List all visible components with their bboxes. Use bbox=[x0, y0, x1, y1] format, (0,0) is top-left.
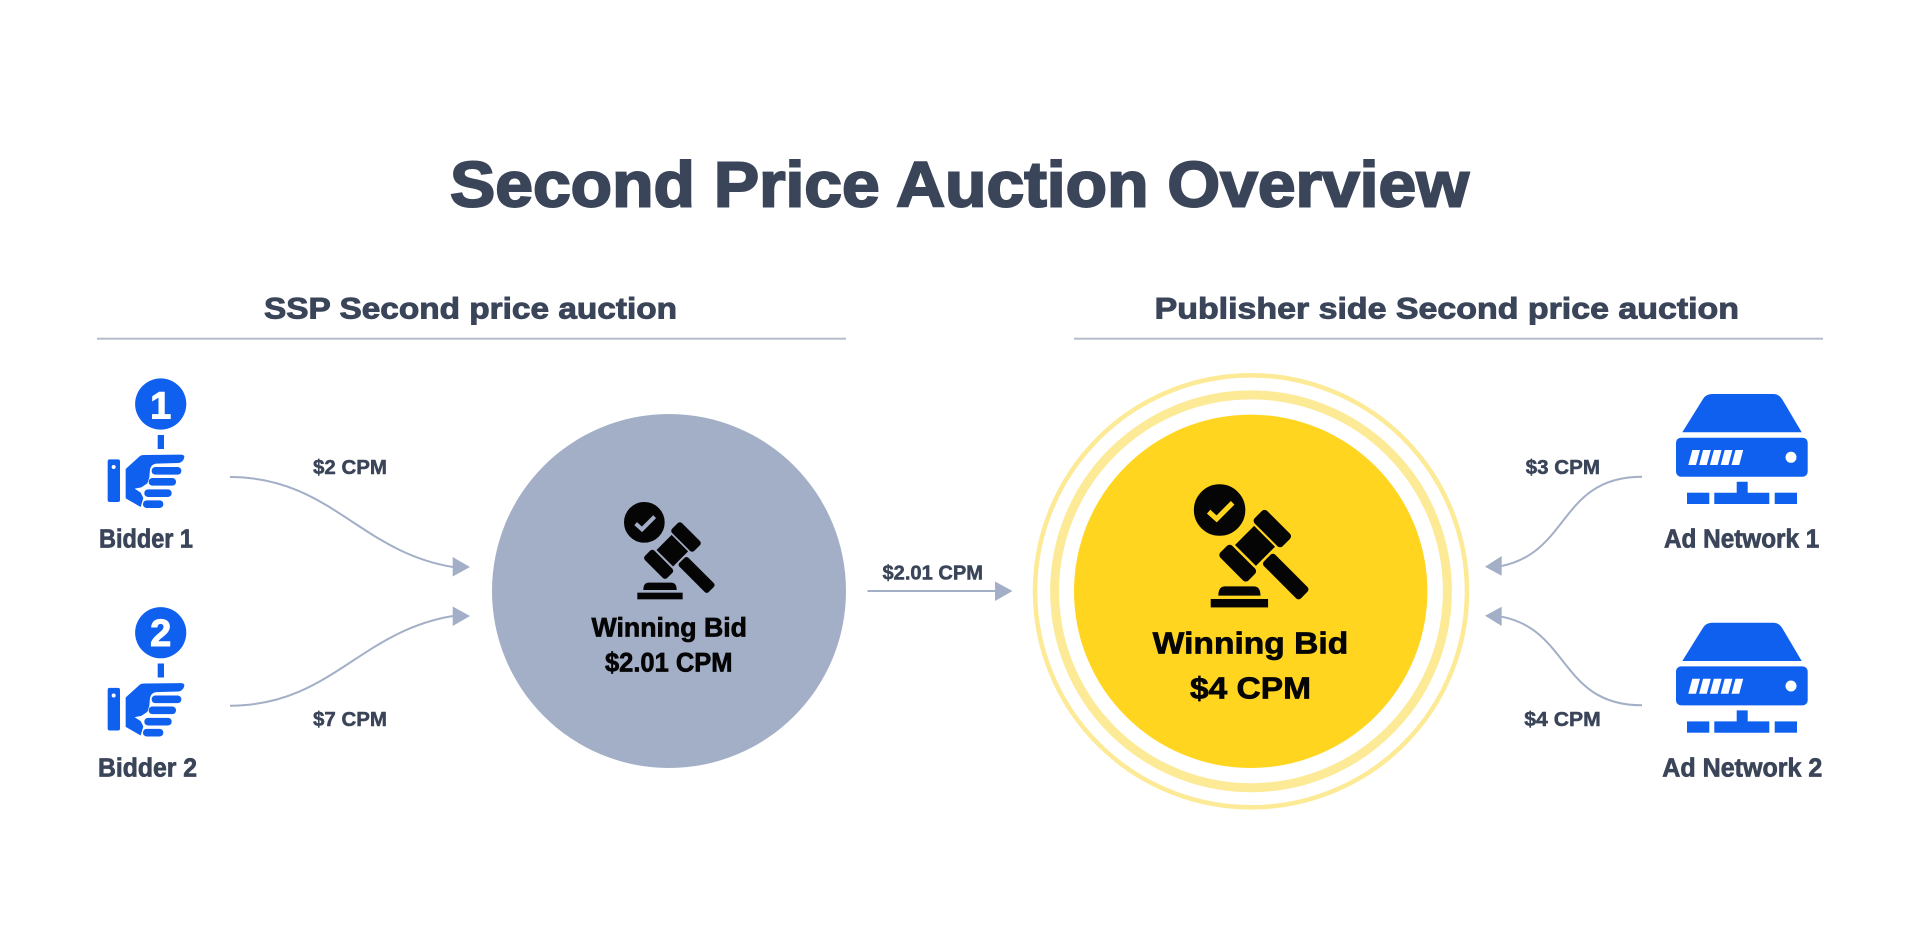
icon: gavel yellow bbox=[1192, 482, 1328, 618]
arrow: bidder 2 to winning bid bbox=[230, 606, 470, 706]
label: ad network 1: Ad Network 1 bbox=[1664, 526, 1819, 554]
text: $2.01 CPM grey: $2.01 CPM bbox=[605, 648, 732, 678]
icon: bidder 1 number badge bbox=[135, 378, 186, 449]
arrow: bidder 1 to winning bid bbox=[230, 477, 470, 576]
label: $2.01 CPM: $2.01 CPM bbox=[882, 562, 983, 584]
label: $7 CPM: $7 CPM bbox=[313, 709, 387, 731]
icon: bidder 2 number badge: 2 bbox=[150, 613, 171, 655]
arrow: SSP to publisher auction bbox=[868, 582, 1012, 601]
heading: publisher side second price auction: Publisher side Second price auction bbox=[1155, 292, 1739, 325]
bidder 2 bbox=[98, 607, 197, 783]
text: winning bid grey: Winning Bid bbox=[592, 613, 747, 643]
panel: SSP second price auction bbox=[97, 292, 846, 783]
text: winning bid yellow: Winning Bid bbox=[1153, 626, 1348, 660]
ad network 1 bbox=[1664, 394, 1819, 554]
icon: ad network 1 server bbox=[1676, 394, 1808, 504]
text: $4 CPM yellow: $4 CPM bbox=[1190, 671, 1311, 705]
bidder 1 bbox=[99, 378, 193, 554]
arrow: ad network 1 to winning bid bbox=[1485, 477, 1642, 576]
label: ad network 2: Ad Network 2 bbox=[1662, 755, 1822, 783]
yellow circle: publisher winning bid bbox=[1035, 375, 1467, 807]
icon: gavel grey bbox=[622, 500, 730, 608]
icon: ad network 2 server bbox=[1676, 623, 1808, 733]
panel: publisher side second price auction bbox=[1035, 292, 1823, 807]
label: $3 CPM: $3 CPM bbox=[1526, 457, 1600, 479]
label: bidder 2: Bidder 2 bbox=[98, 755, 197, 783]
heading: SSP second price auction: SSP Second price auction bbox=[264, 292, 677, 325]
icon: bidder 2 hand bbox=[108, 683, 184, 736]
icon: bidder 2 number badge bbox=[135, 607, 186, 678]
arrow: ad network 2 to winning bid bbox=[1485, 607, 1642, 705]
icon: bidder 1 number badge: 1 bbox=[150, 385, 171, 427]
label: bidder 1: Bidder 1 bbox=[99, 526, 193, 554]
label: $4 CPM: $4 CPM bbox=[1524, 709, 1601, 731]
grey circle: SSP winning bid bbox=[492, 414, 846, 768]
title: Second Price Auction Overview bbox=[450, 149, 1469, 221]
ad network 2 bbox=[1662, 623, 1822, 783]
label: $2 CPM: $2 CPM bbox=[313, 457, 387, 479]
icon: bidder 1 hand bbox=[108, 455, 184, 508]
